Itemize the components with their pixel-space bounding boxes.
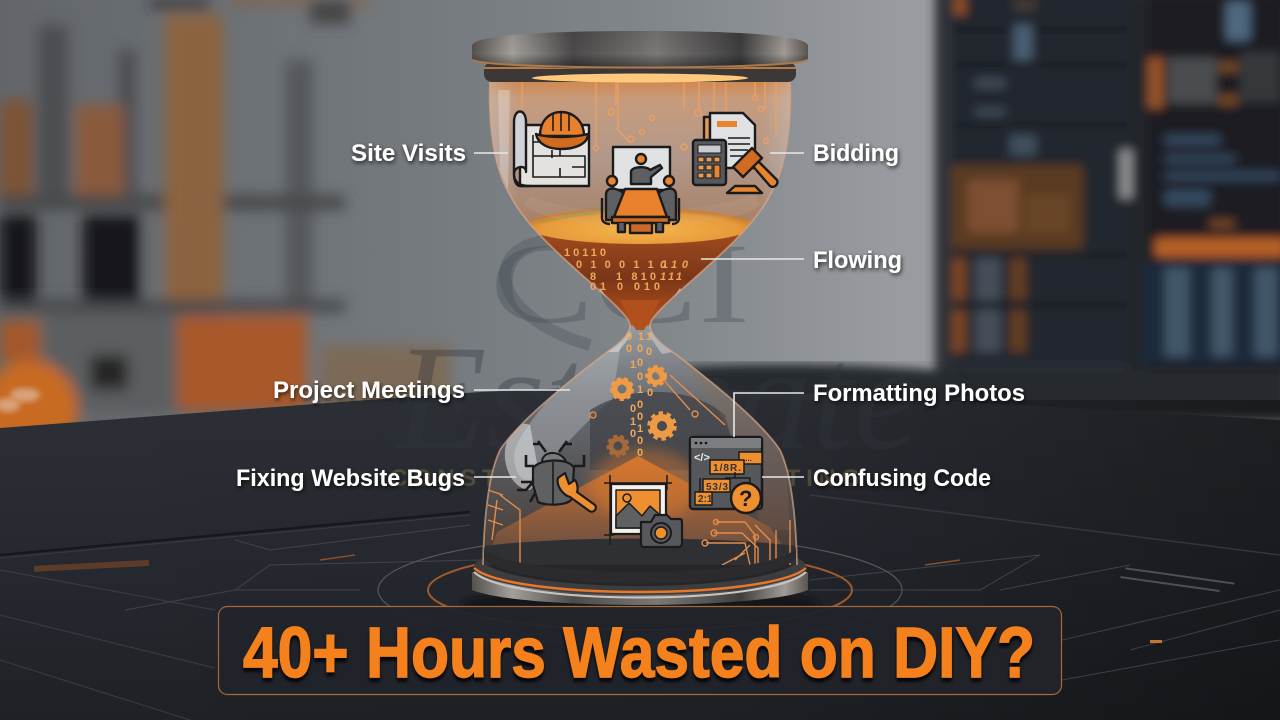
title banner bbox=[218, 606, 1062, 694]
gears bbox=[608, 366, 675, 456]
dark base collar bbox=[484, 548, 796, 584]
binary digits lower: 0 bbox=[637, 343, 643, 355]
top cap: metal lid bbox=[472, 31, 808, 82]
binary digits lower: 0 bbox=[637, 371, 643, 383]
sand funnel upper bbox=[540, 234, 740, 325]
icon: confusing code window: .... bbox=[743, 454, 752, 463]
binary digits lower: 0 bbox=[626, 331, 632, 343]
icon: confusing code window: 1/8R. bbox=[713, 463, 741, 474]
base: metal ring bbox=[472, 530, 808, 605]
icon: confusing code window: 2:1 bbox=[698, 494, 713, 505]
icon: bidding documents, calculator and gavel bbox=[693, 113, 777, 193]
hourglass bbox=[460, 31, 820, 620]
icon: photo and camera bbox=[604, 475, 682, 547]
binary digits lower: 0 bbox=[626, 343, 632, 355]
binary digits lower: 0 bbox=[637, 435, 643, 447]
icon: confusing code window: 53/3 bbox=[706, 482, 728, 493]
blurred server racks bbox=[935, 0, 1280, 420]
icon: site visits blueprint and hard hat bbox=[514, 112, 589, 186]
binary digits lower: 0 bbox=[637, 411, 643, 423]
watermark: CCI Estimate: CONSTRUCTION ESTIMATING bbox=[390, 465, 860, 492]
neck glass highlights bbox=[599, 288, 606, 297]
binary digits lower: 0 bbox=[630, 403, 636, 415]
binary digits upper: 0 1 0 0 1 1 1 bbox=[576, 259, 668, 271]
glass outline bbox=[483, 80, 797, 565]
binary digits upper: 111 bbox=[660, 271, 682, 283]
watermark: CCI Estimate bbox=[390, 220, 920, 492]
binary digits lower: 1 bbox=[630, 416, 636, 428]
watermark: CCI Estimate: Estimate bbox=[393, 315, 920, 481]
label: Flowing: Flowing bbox=[813, 247, 902, 274]
binary digits lower: 1 bbox=[637, 384, 643, 396]
binary digits lower: 1 bbox=[630, 359, 636, 371]
binary digits upper: 8 bbox=[590, 271, 596, 283]
binary digits lower: 0 bbox=[637, 447, 643, 459]
lower sand mound bbox=[492, 456, 782, 545]
binary digits upper: 010 bbox=[660, 259, 689, 271]
binary digits upper: 01 0 010 bbox=[590, 281, 660, 293]
binary digits upper: 1 810 bbox=[616, 271, 656, 283]
watermark: CCI Estimate: CCI bbox=[490, 220, 750, 347]
binary digits lower: 0 bbox=[646, 346, 652, 358]
binary digits lower: 0 bbox=[637, 357, 643, 369]
binary digits upper bbox=[564, 247, 689, 293]
table surface bbox=[0, 364, 1280, 720]
binary digits lower: 0 bbox=[637, 399, 643, 411]
binary digits lower: 0 bbox=[630, 428, 636, 440]
label: Site Visits: Site Visits bbox=[351, 140, 466, 167]
icon: website bug with wrench bbox=[517, 441, 596, 512]
lower bulb body bbox=[480, 326, 800, 566]
label: Confusing Code: Confusing Code bbox=[813, 465, 991, 492]
neck sand stream bbox=[620, 300, 660, 330]
label: Project Meetings: Project Meetings bbox=[273, 377, 465, 404]
binary digits lower: 1 bbox=[638, 331, 644, 343]
binary digits lower bbox=[626, 331, 653, 459]
base shadow bbox=[460, 588, 820, 620]
title text: 40+ Hours Wasted on DIY? bbox=[243, 614, 1035, 693]
icon: confusing code window: ? bbox=[739, 486, 752, 511]
binary digits lower: 1 bbox=[637, 423, 643, 435]
label: Formatting Photos: Formatting Photos bbox=[813, 380, 1025, 407]
binary digits upper: 10110 bbox=[564, 247, 606, 259]
binary digits lower: 1 bbox=[646, 331, 652, 343]
label: Bidding: Bidding bbox=[813, 140, 899, 167]
circuit traces lower bbox=[488, 370, 790, 565]
circuit traces upper bbox=[522, 80, 776, 150]
glass body with contents bbox=[480, 75, 800, 566]
icon: confusing code window bbox=[690, 437, 762, 513]
connector lines bbox=[474, 153, 804, 477]
binary digits lower: 0 bbox=[647, 387, 653, 399]
icon: project meeting at a table bbox=[602, 147, 679, 233]
icon: confusing code window: </> bbox=[694, 452, 710, 464]
glass glare bbox=[498, 90, 510, 190]
label: Fixing Website Bugs: Fixing Website Bugs bbox=[236, 465, 465, 492]
